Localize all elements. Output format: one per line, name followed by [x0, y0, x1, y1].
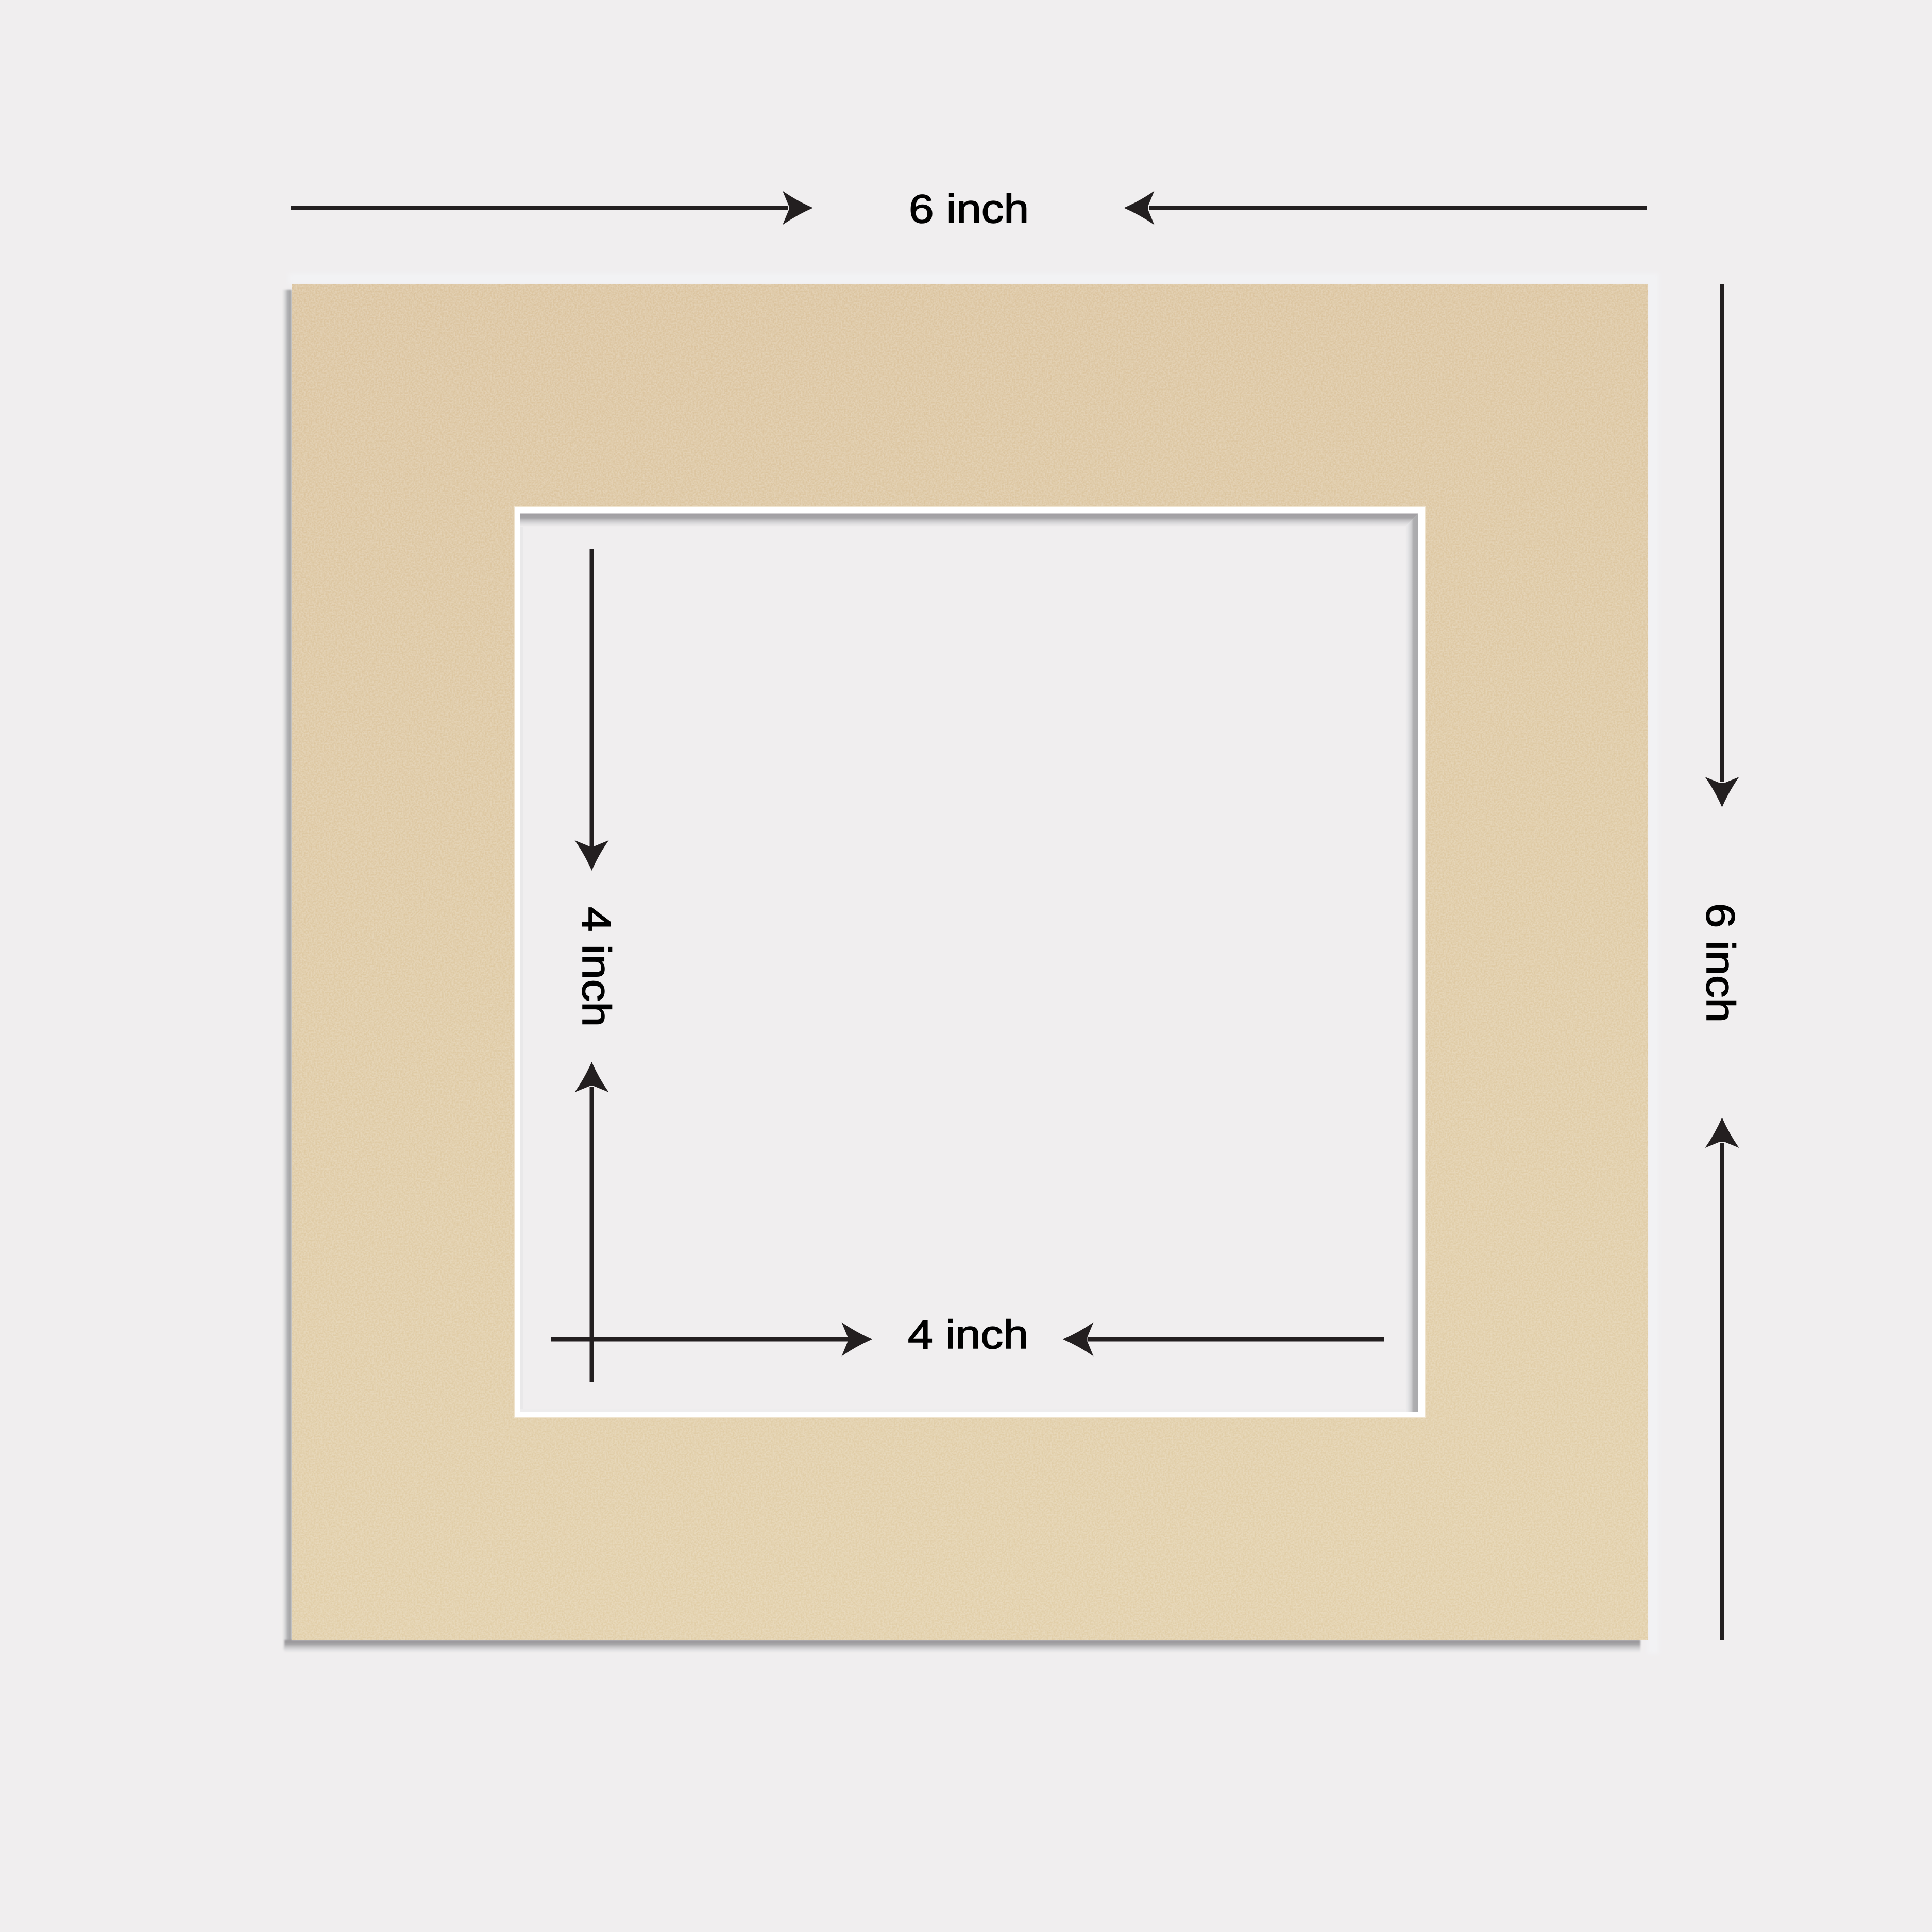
arrow: top dimension left	[291, 191, 813, 225]
label: inner left 4 inch: 4 inch	[574, 907, 619, 1027]
label: inner bottom 4 inch: 4 inch	[908, 1312, 1028, 1357]
arrow: inner left dimension top	[575, 549, 609, 871]
arrow: inner bottom dimension left	[551, 1322, 872, 1356]
arrow: inner left dimension bottom	[575, 1062, 609, 1382]
mat window opening	[514, 506, 1426, 1418]
arrow: inner bottom dimension right	[1063, 1322, 1384, 1356]
arrow: right dimension top	[1705, 284, 1739, 807]
arrow: right dimension bottom	[1705, 1117, 1739, 1640]
arrow: top dimension right	[1124, 191, 1647, 225]
label: top 6 inch: 6 inch	[909, 186, 1029, 231]
mat board with drop shadow	[282, 273, 1659, 1654]
label: right 6 inch: 6 inch	[1698, 903, 1743, 1023]
